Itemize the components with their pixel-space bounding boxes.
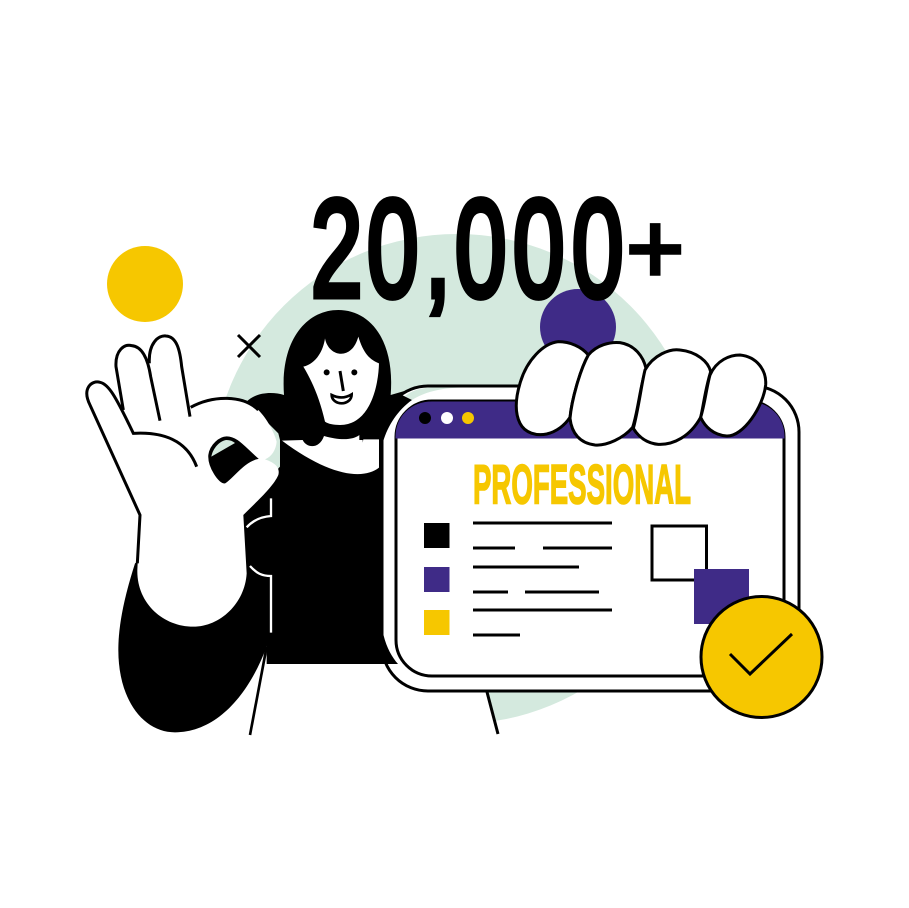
card: hair over top-left corner [378, 395, 412, 442]
card: window dots [419, 412, 474, 424]
sleeve seams [247, 498, 271, 633]
card: inner window [396, 401, 784, 676]
list bullets [424, 523, 450, 635]
face [303, 337, 379, 425]
title: 20,000+: + [626, 193, 684, 305]
card: torso over bottom-left corner [378, 628, 398, 664]
person [87, 310, 413, 735]
heading: PROFESSIONAL: PROFESSIONAL [473, 454, 691, 516]
decorative circle: yellow [107, 246, 183, 322]
background circle: green [212, 234, 702, 724]
card: green corner wedge [405, 388, 462, 400]
right leg [487, 692, 498, 734]
list text lines [473, 523, 612, 635]
purple square [694, 569, 749, 624]
hair and shoulders [247, 310, 413, 440]
title: 20,000+: 2 [311, 171, 362, 325]
neckline [282, 435, 379, 474]
title: 20,000+: , [425, 171, 451, 325]
sleeve [118, 533, 272, 732]
icon: x mark [238, 335, 260, 357]
title: 20,000+: 0 [513, 171, 564, 325]
left leg [250, 647, 267, 735]
title: 20,000+ [311, 171, 684, 325]
title: 20,000+: 0 [572, 171, 623, 325]
title: 20,000+: 0 [455, 171, 506, 325]
card: title bar [396, 402, 784, 438]
holding hand fingers [516, 342, 766, 445]
decorative circle: purple [540, 289, 616, 365]
torso [240, 437, 400, 664]
white legs area [250, 660, 498, 735]
card: outer frame [382, 386, 799, 691]
outlined square [652, 526, 706, 580]
check badge [701, 596, 822, 718]
hand [87, 336, 279, 627]
title: 20,000+: 0 [367, 171, 418, 325]
